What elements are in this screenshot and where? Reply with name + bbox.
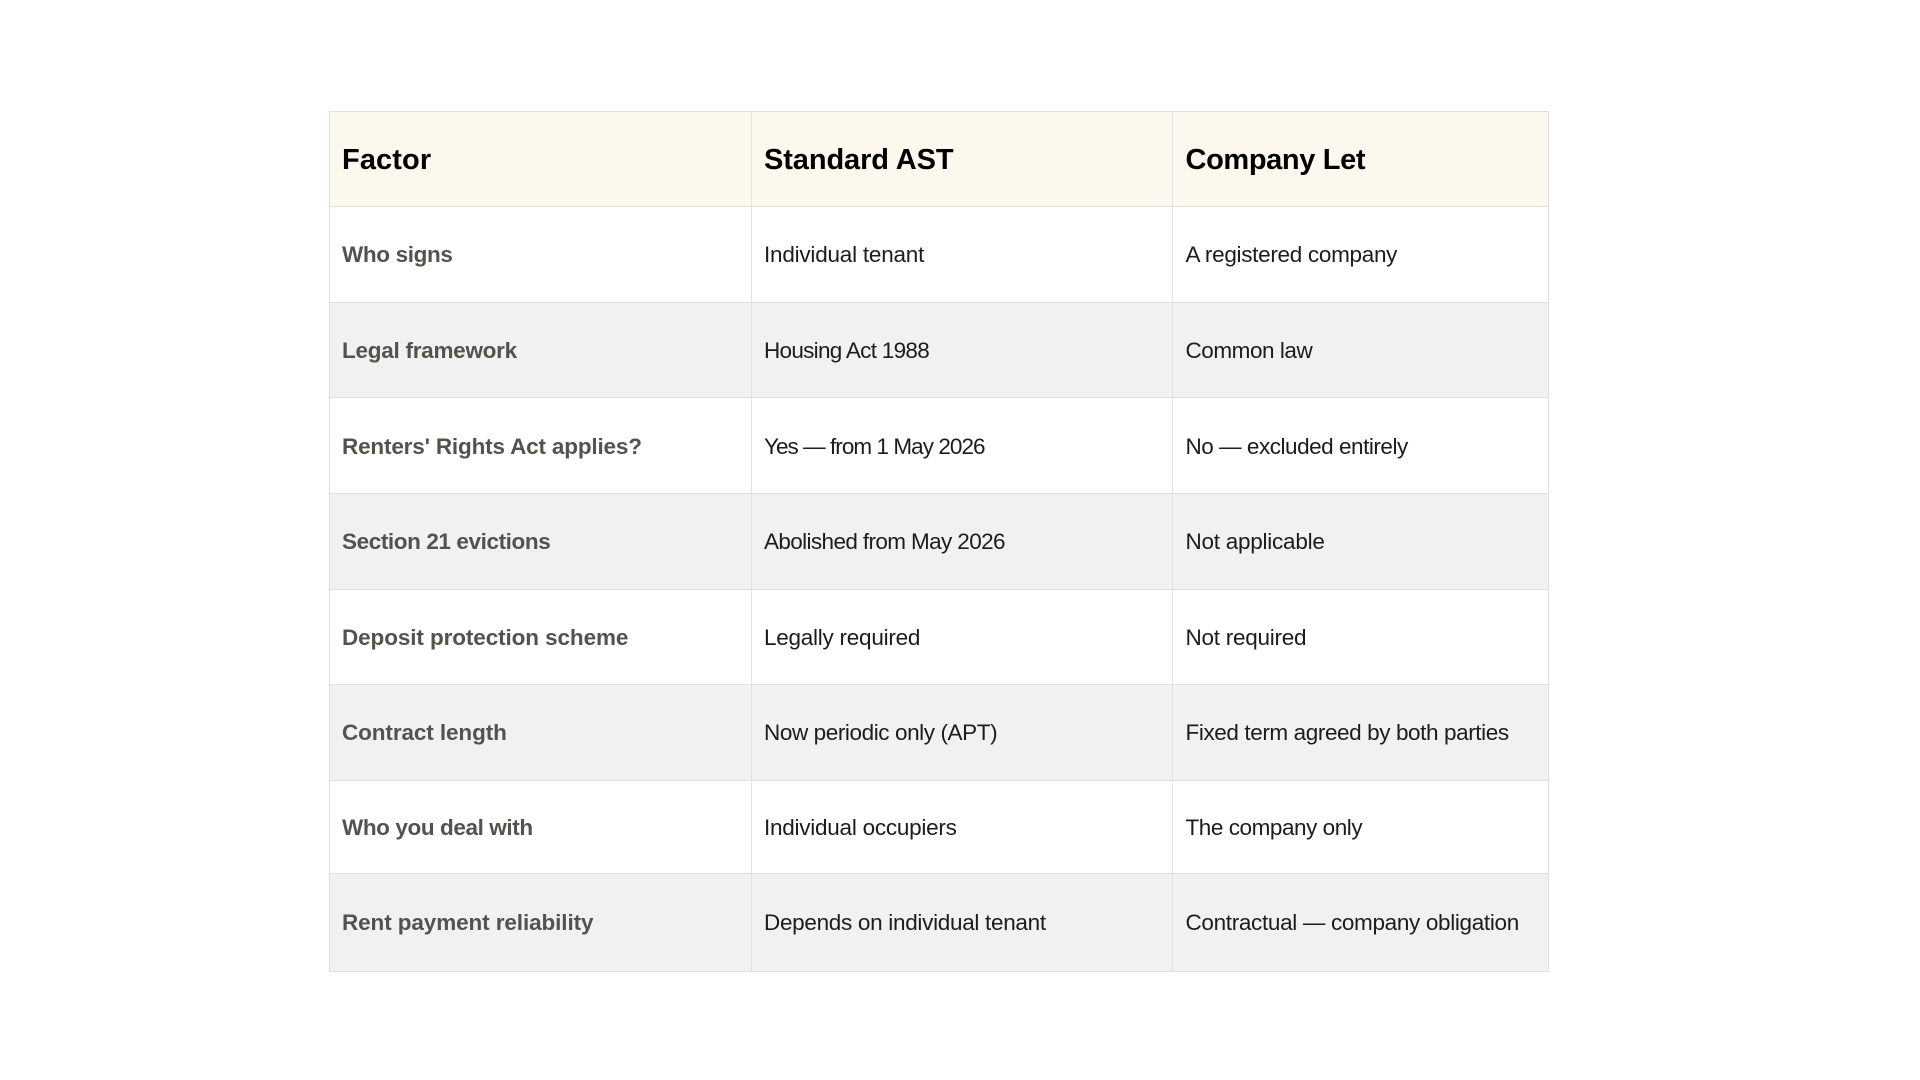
header row [329, 111, 1549, 206]
row: contract length: Fixed term agreed by both parties [1186, 720, 1509, 744]
row: renters' rights act: Yes — from 1 May 2026 [764, 434, 985, 458]
row: who you deal with [329, 780, 1549, 873]
row: renters' rights act: Renters' Rights Act applies? [342, 434, 642, 458]
row: legal framework: Housing Act 1988 [764, 338, 929, 363]
row: legal framework: Legal framework [342, 338, 517, 363]
row: rent payment reliability: Rent payment reliability [342, 910, 593, 934]
row: who you deal with: Individual occupiers [764, 815, 957, 840]
row: deposit protection scheme: Deposit protection scheme [342, 625, 628, 650]
row: who you deal with: Who you deal with [342, 815, 533, 840]
comparison table [329, 111, 1549, 972]
row: rent payment reliability: Depends on individual tenant [764, 910, 1046, 934]
row: who signs: Individual tenant [764, 242, 924, 266]
row: who signs: Who signs [342, 242, 453, 266]
row: renters' rights act: No — excluded entirely [1186, 434, 1408, 458]
row: section 21 evictions: Not applicable [1186, 528, 1325, 554]
row: contract length: Contract length [342, 720, 507, 744]
row: section 21 evictions: Abolished from May 2026 [764, 528, 1005, 554]
header row: Company Let [1186, 144, 1365, 176]
row: deposit protection scheme: Legally required [764, 625, 920, 650]
row: legal framework [329, 302, 1549, 397]
row: legal framework: Common law [1186, 338, 1312, 363]
row: section 21 evictions [329, 493, 1549, 589]
row: deposit protection scheme [329, 589, 1549, 684]
row: who you deal with: The company only [1186, 815, 1362, 840]
row: contract length: Now periodic only (APT) [764, 720, 997, 744]
header row: Factor [342, 144, 431, 176]
row: contract length [329, 684, 1549, 780]
row: who signs [329, 206, 1549, 302]
header row: Standard AST [764, 144, 953, 176]
row: who signs: A registered company [1186, 242, 1397, 266]
row: section 21 evictions: Section 21 evictions [342, 528, 550, 554]
row: rent payment reliability [329, 873, 1549, 972]
row: deposit protection scheme: Not required [1186, 625, 1306, 650]
row: renters' rights act [329, 397, 1549, 493]
row: rent payment reliability: Contractual — company obligation [1186, 910, 1519, 934]
